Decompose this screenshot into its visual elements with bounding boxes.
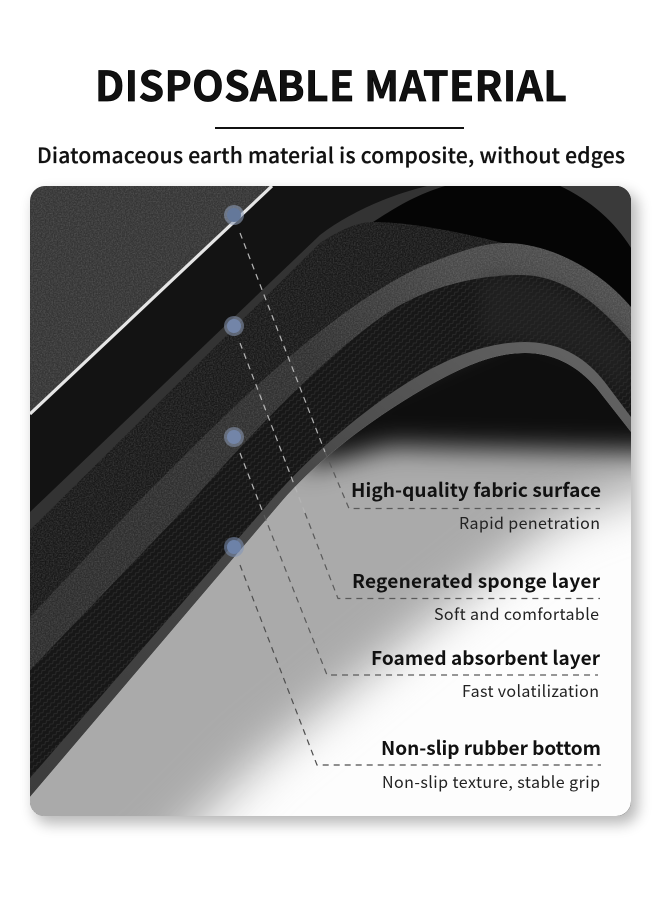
label: sponge layer xyxy=(352,567,601,625)
marker dot 4 xyxy=(224,537,244,557)
grey gradient wash xyxy=(30,354,631,816)
panel: material cross-section xyxy=(30,186,631,816)
black upper arch xyxy=(373,186,631,306)
regenerated sponge layer xyxy=(30,243,631,816)
dark shadow under arch xyxy=(302,353,631,484)
white edge line xyxy=(30,186,272,414)
panel shadow xyxy=(34,192,638,824)
label: fabric surface: Rapid penetration xyxy=(459,510,600,534)
foam shading near the arch crown xyxy=(488,273,631,368)
label: rubber bottom: Non-slip rubber bottom xyxy=(381,734,601,761)
rubber bottom stripe xyxy=(30,342,631,816)
label: foamed layer xyxy=(371,644,601,702)
white floor xyxy=(30,340,631,820)
leader line 2 xyxy=(240,343,600,598)
upper grey stripe xyxy=(30,186,444,530)
subtitle: Diatomaceous earth material is composite, without edges xyxy=(37,140,625,170)
label: sponge layer: Soft and comfortable xyxy=(434,601,599,625)
fabric surface layer xyxy=(30,222,631,816)
label: foamed layer: Foamed absorbent layer xyxy=(371,644,601,671)
label: fabric surface xyxy=(351,476,601,534)
marker dot 3 xyxy=(224,427,244,447)
foamed absorbent layer xyxy=(30,275,631,816)
label: fabric surface: High-quality fabric surface xyxy=(351,476,601,503)
black top layer xyxy=(30,186,631,816)
leader line 1 xyxy=(240,233,600,508)
title rule xyxy=(215,127,464,129)
label: rubber bottom xyxy=(381,734,601,793)
under-arch shadow and light background xyxy=(30,353,631,816)
label: rubber bottom: Non-slip texture, stable grip xyxy=(382,769,600,793)
top-right grey corner xyxy=(560,186,631,248)
label: foamed layer: Fast volatilization xyxy=(462,678,599,702)
marker dot 1 xyxy=(224,205,244,225)
leader line 4 xyxy=(240,565,601,765)
marker dot 2 xyxy=(224,316,244,336)
label: sponge layer: Regenerated sponge layer xyxy=(352,567,601,594)
leader line 3 xyxy=(240,453,598,675)
title: DISPOSABLE MATERIAL xyxy=(95,53,567,113)
background top-left surface xyxy=(30,186,631,816)
